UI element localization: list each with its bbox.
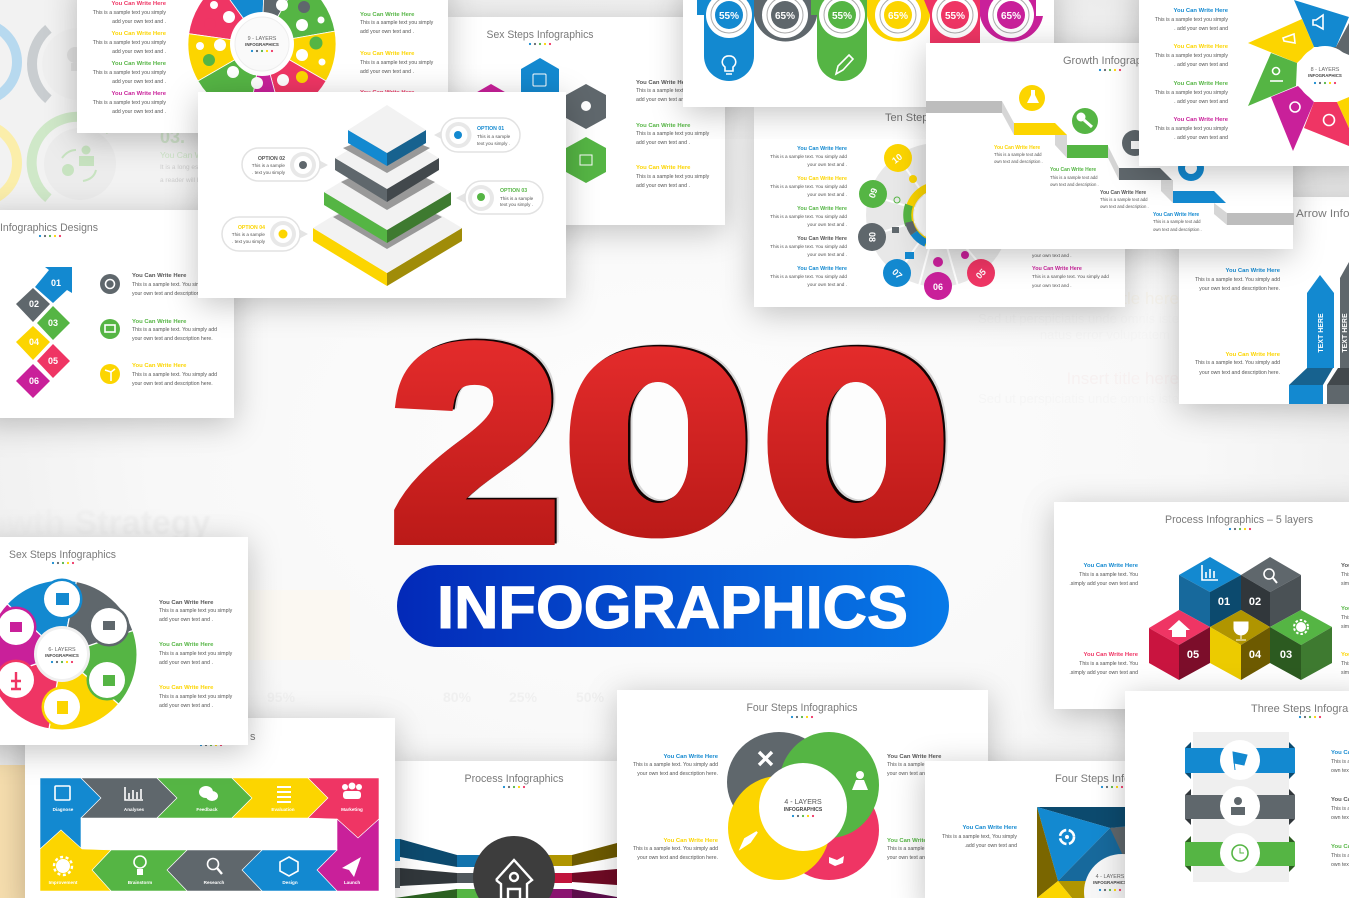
panel: growth stairs: This is a sample text add: [1100, 197, 1148, 202]
panel: four steps petals: your own text and description here.: [887, 855, 968, 861]
faded background text: natus error voluptatem: [1040, 327, 1170, 342]
panel: infographics designs: This is a sample text. You simply add: [132, 282, 217, 288]
panel: ten steps wheel: This is a sample text. You simply add: [770, 214, 847, 219]
isometric cubes: [1149, 557, 1332, 680]
icon: key: [1072, 108, 1098, 134]
panel: four steps polygon: This is a sample text, You simply: [942, 834, 1017, 840]
panel: infographics designs: This is a sample text. You simply add: [132, 327, 217, 333]
panel title: Process Infographics: [464, 773, 564, 785]
panel title: Four Steps Infographics: [746, 702, 858, 714]
puzzle arrow steps: 05: [48, 356, 58, 366]
chevron icons: [54, 782, 362, 877]
panel: infographics designs: your own text and description here.: [132, 381, 213, 387]
callout: option 03: [456, 181, 543, 214]
puzzle arrow steps: 02: [29, 299, 39, 309]
panel: ten steps wheel: This is a sample text. You simply add: [1032, 274, 1109, 279]
icon: globe: [1178, 155, 1204, 181]
panel: eight layer star: . add your own text and: [1174, 26, 1228, 32]
callout: option 03: OPTION 03: [500, 188, 527, 194]
pill gray 65%: [754, 0, 817, 42]
panel: ten steps wheel: your own text and .: [807, 162, 847, 167]
panel: process arrows: Brainstorm: [128, 880, 152, 885]
panel: infographics designs: You Can Write Here: [132, 273, 187, 279]
panel: six hexagon steps: You Can Write Here: [636, 165, 691, 171]
panel: eight layer star: This is a sample text you simply: [1155, 90, 1228, 96]
panel: process arrows: Analyses: [124, 807, 145, 812]
panel: infographics designs: your own text and description here.: [132, 336, 213, 342]
panel: arrow infographic: your own text and description here.: [1199, 370, 1280, 376]
panel: four steps petals: You Can Write Here: [664, 838, 719, 844]
faded background text: 25%: [509, 689, 538, 705]
panel: four steps polygon: .add your own text and: [964, 843, 1017, 849]
panel: six hexagon steps: add your own text and .: [636, 97, 690, 103]
panel: four steps polygon: You Can Write Here: [963, 825, 1018, 831]
big number 200: 0: [768, 299, 952, 580]
overlapping petals: 4 - LAYERS: [784, 799, 822, 806]
panel: infographics designs: your own text and description here.: [132, 291, 213, 297]
panel: process arrows: Design: [282, 880, 298, 885]
panel: eight layer star: This is a sample text you simply: [1155, 126, 1228, 132]
panel: faded rings: [0, 0, 225, 210]
panel: infographics designs: This is a sample text. You simply add: [132, 372, 217, 378]
panel: six hexagon steps: add your own text and .: [636, 140, 690, 146]
big number 200: 2: [394, 290, 560, 594]
polygon shape: 4 - LAYERS: [1096, 874, 1125, 880]
six step ring: [0, 578, 137, 730]
pill blue 55%: [697, 0, 761, 81]
panel: growth stairs: This is a sample text add: [1153, 219, 1201, 224]
panel: four steps petals: This is a sample text. You simply add: [887, 762, 972, 768]
panel: process 5 layers: You Can Write Here: [1084, 652, 1139, 658]
panel: ten steps wheel: your own text and .: [807, 192, 847, 197]
pill gray 65%: 65%: [775, 11, 795, 22]
ten step wheel: 09: [867, 187, 879, 199]
panel: ten steps wheel: [754, 107, 1125, 307]
ten step wheel: 06: [933, 282, 943, 292]
panel: ten steps wheel: You Can Write Here: [797, 176, 847, 182]
panel: eight layer star: You Can Write Here: [1174, 8, 1229, 14]
panel: growth stairs: This is a sample text add: [994, 152, 1042, 157]
panel: ten steps wheel: This is a sample text. You simply add: [770, 184, 847, 189]
panel: process arrows: Diagnose: [53, 807, 74, 812]
panel: nine layer puzzle wheel: You Can Write Here: [112, 31, 167, 37]
panel: nine layer puzzle wheel: You Can Write Here: [112, 91, 167, 97]
big number 200: 0: [766, 300, 950, 581]
panel: four steps petals: This is a sample text. You simply add: [887, 846, 972, 852]
panel: growth stairs: own text and description .: [994, 159, 1043, 164]
ribbon blue: [1185, 740, 1295, 780]
panel: ten steps wheel: your own text and .: [807, 222, 847, 227]
panel: sex steps ring: This is a sample text you simply: [159, 608, 233, 614]
panel: eight layer star: . add your own text and: [1174, 99, 1228, 105]
panel: sex steps ring: add your own text and .: [159, 617, 213, 623]
panel: four steps petals: You Can Write Here: [887, 838, 942, 844]
arrow gray: [1327, 262, 1349, 404]
panel: four steps petals: [617, 690, 988, 898]
panel: faded rings: 03.: [160, 127, 185, 147]
faded background text: Insert title here: [1067, 369, 1179, 388]
big number 200: 0: [570, 299, 754, 580]
icon: flask: [1019, 85, 1045, 111]
panel: process arrows: Launch: [344, 880, 360, 885]
panel: eight layer star: [1139, 0, 1349, 166]
big number 200: 0: [566, 302, 750, 583]
fan bands: [395, 839, 617, 898]
panel: sex steps ring: add your own text and .: [159, 703, 213, 709]
overlapping petals: [727, 732, 879, 880]
pill green 55%: 55%: [832, 11, 852, 22]
puzzle wheel: [188, 0, 336, 118]
callout: option 04: . text you simply: [232, 239, 266, 244]
ribbon gray: [1185, 786, 1295, 826]
callout: option 02: This is a sample: [252, 163, 285, 168]
panel: nine layer puzzle wheel: [77, 0, 448, 133]
panel: growth stairs: own text and description .: [1153, 227, 1202, 232]
panel: sex steps ring: This is a sample text you simply: [159, 694, 233, 700]
pill magenta 65%: [980, 0, 1043, 42]
isometric cubes: 05: [1187, 649, 1199, 661]
chevron loop: [40, 778, 379, 891]
panel: arrow infographic: This is a sample text. You simply add: [1195, 360, 1280, 366]
six step ring: 6- LAYERS: [48, 647, 76, 653]
panel title: Four Steps Infographics: [1055, 773, 1172, 785]
panel title: Ten Steps Infographics: [885, 112, 997, 124]
polygon shape: [1037, 807, 1160, 898]
big number 200: 2: [392, 291, 558, 596]
panel: six hexagon steps: This is a sample text you simply: [636, 174, 710, 180]
icon: cart: [100, 319, 120, 339]
star wheel: 8 - LAYERS: [1311, 67, 1340, 73]
panel: growth stairs: [926, 43, 1294, 249]
panel: eight layer star: You Can Write Here: [1174, 44, 1229, 50]
ten step wheel: 10: [890, 152, 904, 166]
panel: arrow infographic: This is a sample text. You simply add: [1195, 277, 1280, 283]
panel: four steps petals: your own text and description here.: [637, 855, 718, 861]
panel: arrow infographic: [1179, 197, 1349, 404]
callout: option 02: . text you simply: [252, 170, 286, 175]
panel: nine layer puzzle wheel: add your own text and .: [360, 69, 414, 75]
panel: ten steps wheel: This is a sample text. You simply add: [770, 274, 847, 279]
panel: four steps petals: This is a sample text. You simply add: [633, 846, 718, 852]
icon: lock: [1122, 130, 1148, 156]
six step ring: INFOGRAPHICS: [45, 653, 79, 658]
panel: sex steps ring: add your own text and .: [159, 660, 213, 666]
panel: growth stairs: You Can Write Here: [1050, 167, 1096, 173]
puzzle arrow steps: 01: [51, 278, 61, 288]
panel: growth stairs: You Can Write Here: [994, 145, 1040, 151]
panel: four steps petals: your own text and description here.: [887, 771, 968, 777]
star wheel: [1248, 0, 1349, 151]
isometric cubes: 04: [1249, 649, 1262, 661]
panel: process 5 layers: .simply add your own text and: [1069, 670, 1138, 676]
panel: infographics designs: [0, 210, 234, 418]
panel: process arrows: Research: [204, 880, 225, 885]
icon: gear: [100, 274, 120, 294]
callout: option 02: OPTION 02: [258, 156, 285, 162]
panel: six hexagon steps: This is a sample text you simply: [636, 131, 710, 137]
panel title: Infographics Designs: [0, 222, 98, 234]
icon: house: [496, 860, 532, 898]
panel: infographics designs: You Can Write Here: [132, 319, 187, 325]
panel: growth stairs: own text and description .: [1050, 182, 1099, 187]
ten step wheel: 08: [867, 232, 877, 242]
panel title: Sex Steps Infographics: [9, 549, 116, 561]
panel: nine layer puzzle wheel: You Can Write Here: [112, 1, 167, 7]
panel: process 5 layers: This is a sample text. You: [1079, 661, 1138, 667]
panel: nine layer puzzle wheel: This is a sample text you simply: [93, 70, 166, 76]
panel: eight layer star: This is a sample text you simply: [1155, 53, 1228, 59]
panel: growth stairs: You Can Write Here: [1100, 190, 1146, 196]
pill red 55%: 55%: [945, 11, 965, 22]
panel: eight layer star: You Can Write Here: [1174, 117, 1229, 123]
panel: four steps petals: You Can Write Here: [887, 754, 942, 760]
star wheel: INFOGRAPHICS: [1308, 73, 1342, 78]
panel: nine layer puzzle wheel: add your own text and .: [112, 79, 166, 85]
panel: infographics designs: You Can Write Here: [132, 363, 187, 369]
callout: option 01: text you simply .: [477, 141, 510, 146]
panel: ten steps wheel: You Can Write Here: [1032, 266, 1082, 272]
callout: option 01: This is a sample: [477, 134, 511, 139]
panel: nine layer puzzle wheel: INFOGRAPHICS: [245, 42, 279, 47]
panel: nine layer puzzle wheel: You Can Write Here: [360, 51, 415, 57]
panel: process arrows: Evaluation: [271, 807, 295, 812]
panel: nine layer puzzle wheel: add your own text and .: [112, 109, 166, 115]
arrow gray: TEXT HERE: [1342, 313, 1349, 353]
pill yellow 65%: [867, 0, 930, 42]
faded background text: [0, 289, 1179, 898]
panel: four steps petals: your own text and description here.: [637, 771, 718, 777]
big number 200: 0: [764, 302, 948, 583]
icon: figure: [100, 364, 120, 384]
panel: nine layer puzzle wheel: You Can Write Here: [112, 61, 167, 67]
panel: six hexagon steps: You Can Write Here: [636, 80, 691, 86]
panel: faded rings: a reader will be: [160, 177, 204, 184]
ten step wheel: 05: [974, 267, 988, 281]
panel: faded rings: It is a long established: [160, 164, 225, 171]
panel: nine layer puzzle wheel: This is a sample text you simply: [93, 100, 166, 106]
panel: four steps petals: You Can Write Here: [664, 754, 719, 760]
panel: sex steps ring: You Can Write Here: [159, 600, 214, 606]
panel: ten steps wheel: You Can Write Here: [797, 266, 847, 272]
panel title: Process Infographics – 5 layers: [1165, 514, 1313, 526]
pill red 55%: [924, 0, 980, 50]
infographics pill: [397, 565, 949, 647]
puzzle arrow steps: 04: [29, 337, 39, 347]
callout: option 03: text you simply .: [500, 202, 533, 207]
panel: sex steps ring: This is a sample text you simply: [159, 651, 233, 657]
panel: growth stairs: This is a sample text add: [1050, 175, 1098, 180]
panel: process infographics house: [395, 761, 625, 898]
panel: ten steps wheel: You Can Write Here: [797, 236, 847, 242]
panel: faded rings: You Can Write: [160, 150, 215, 160]
pill magenta 65%: 65%: [1001, 11, 1021, 22]
panel: nine layer puzzle wheel: This is a sample text you simply: [360, 60, 434, 66]
panel: process 5 layers: .simply add your own text and: [1069, 581, 1138, 587]
isometric stack: [313, 105, 462, 286]
panel: nine layer puzzle wheel: add your own text and .: [360, 29, 414, 35]
arrow blue: TEXT HERE: [1318, 313, 1325, 353]
callout: option 01: [434, 118, 520, 152]
panel: ten steps wheel: You Can Write Here: [797, 206, 847, 212]
panel: nine layer puzzle wheel: You Can Write Here: [360, 90, 415, 96]
panel title: s: [250, 731, 256, 743]
panel: sex steps ring: You Can Write Here: [159, 685, 214, 691]
big number 200: [394, 338, 948, 545]
polygon shape: INFOGRAPHICS: [1093, 880, 1127, 885]
panel: sex steps ring: [0, 537, 248, 745]
panel: six hexagon steps: [448, 17, 725, 225]
panel title: Sex Steps Infographics: [486, 29, 594, 41]
faded background text: 95%: [267, 689, 296, 705]
panel: nine layer puzzle wheel: add your own text and .: [112, 19, 166, 25]
panel: ten steps wheel: This is a sample text. You simply add: [770, 154, 847, 159]
panel: nine layer puzzle wheel: This is a sample text you simply: [93, 10, 166, 16]
panel: process 5 layers: You Can Write Here: [1084, 563, 1139, 569]
panel: process arrows: Improvement: [49, 880, 78, 885]
panel: arrow infographic: your own text and description here.: [1199, 286, 1280, 292]
panel: process arrows: Marketing: [341, 807, 363, 812]
panel: nine layer puzzle wheel: You Can Write Here: [360, 12, 415, 18]
panel: nine layer puzzle wheel: This is a sample text you simply: [360, 20, 434, 26]
faded background text: 50%: [576, 689, 605, 705]
panel: growth stairs: You Can Write Here: [1153, 212, 1199, 218]
callout: option 01: OPTION 01: [477, 126, 504, 132]
pill blue 55%: 55%: [719, 11, 739, 22]
panel: ten steps wheel: You Can Write Here: [797, 146, 847, 152]
panel: nine layer puzzle wheel: This is a sample text you simply: [93, 40, 166, 46]
panel: ten steps wheel: your own text and .: [807, 252, 847, 257]
panel title: Growth Infographics: [1063, 55, 1162, 67]
infographics pill: INFOGRAPHICS: [437, 574, 908, 641]
panel: process arrows: Feedback: [196, 807, 218, 812]
panel: ten steps wheel: your own text and .: [807, 282, 847, 287]
panel: arrow infographic: You Can Write Here: [1226, 268, 1281, 274]
panel: nine layer puzzle wheel: This is a sample text you simply: [360, 99, 434, 105]
panel: isometric layers: [198, 92, 566, 298]
panel: four steps petals: This is a sample text. You simply add: [633, 762, 718, 768]
isometric cubes: 03: [1280, 649, 1292, 661]
panel: six hexagon steps: This is a sample text you simply: [636, 88, 710, 94]
arrow blue: [1289, 275, 1334, 404]
panel: three steps ribbons: [1125, 691, 1349, 898]
ribbon green: [1185, 833, 1295, 873]
panel: eight layer star: . add your own text and: [1174, 62, 1228, 68]
callout: option 03: This is a sample: [500, 196, 534, 201]
callout: option 04: [222, 217, 308, 251]
faded background text: Sed ut perspiciatis unde omnis iste: [978, 391, 1179, 406]
panel: arrow infographic: You Can Write Here: [1226, 352, 1281, 358]
panel: percentage pills: [683, 0, 1054, 107]
callout: option 04: This is a sample: [232, 232, 265, 237]
puzzle arrow steps: [16, 267, 72, 398]
pill yellow 65%: 65%: [888, 11, 908, 22]
panel: sex steps ring: You Can Write Here: [159, 642, 214, 648]
panel: eight layer star: . add your own text and: [1174, 135, 1228, 141]
faded background text: 80%: [443, 689, 472, 705]
callout: option 02: [242, 148, 328, 181]
isometric cubes: 01: [1218, 596, 1230, 608]
panel: nine layer puzzle wheel: 9 - LAYERS: [248, 36, 277, 42]
pill green 55%: [811, 0, 873, 81]
panel: six hexagon steps: You Can Write Here: [636, 123, 691, 129]
puzzle arrow steps: 06: [29, 376, 39, 386]
faded background text: Sed ut perspiciatis unde omnis iste: [978, 311, 1179, 326]
panel: six hexagon steps: add your own text and .: [636, 183, 690, 189]
big number 200: 0: [568, 300, 752, 581]
panel: nine layer puzzle wheel: add your own text and .: [112, 49, 166, 55]
panel: process arrows: [25, 718, 395, 898]
panel: ten steps wheel: This is a sample text. You simply add: [770, 244, 847, 249]
ten step wheel: 07: [890, 267, 904, 281]
puzzle arrow steps: 03: [48, 318, 58, 328]
panel: process 5 layers: This is a sample text. You: [1079, 572, 1138, 578]
isometric cubes: 02: [1249, 596, 1261, 608]
faded background text: Insert title here: [1067, 289, 1179, 308]
panel: four steps polygon: [925, 761, 1172, 898]
panel: eight layer star: You Can Write Here: [1174, 81, 1229, 87]
overlapping petals: INFOGRAPHICS: [784, 807, 823, 813]
ten step wheel: [858, 143, 1010, 300]
panel: process 5 layers: [1054, 502, 1349, 709]
panel: eight layer star: This is a sample text you simply: [1155, 17, 1228, 23]
panel: ten steps wheel: your own text and .: [1032, 253, 1072, 258]
callout: option 04: OPTION 04: [238, 225, 265, 231]
big number 200: 2: [396, 289, 562, 593]
staircase: [926, 101, 1294, 225]
panel: ten steps wheel: your own text and .: [1032, 283, 1072, 288]
panel: growth stairs: own text and description .: [1100, 204, 1149, 209]
